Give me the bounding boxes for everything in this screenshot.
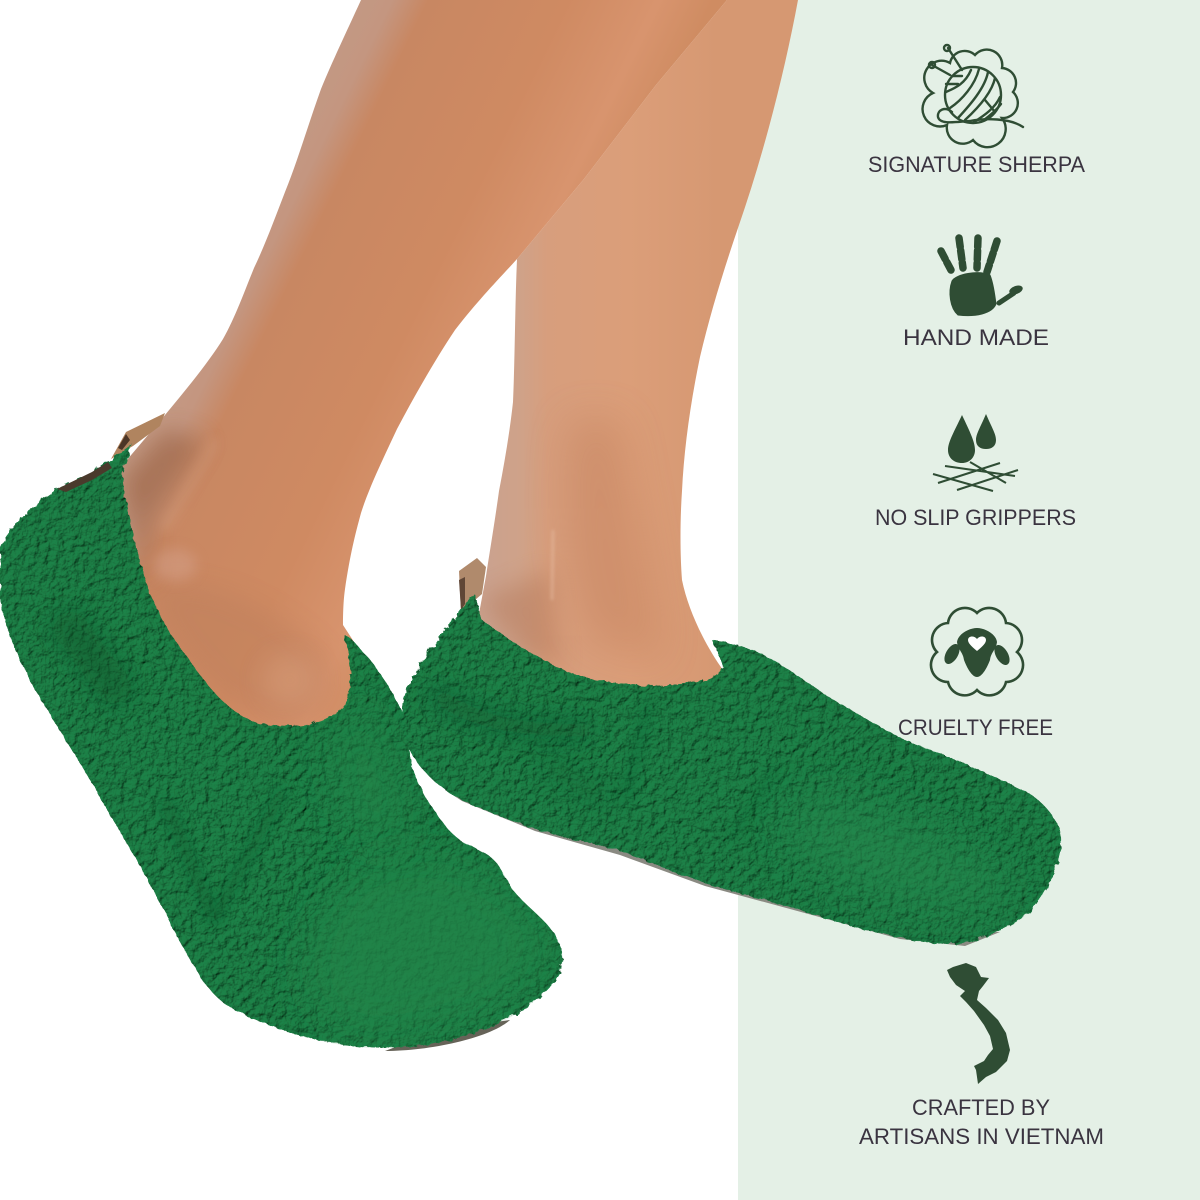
slipper: front foot: [0, 443, 563, 1048]
icon: map of Vietnam: [947, 963, 1010, 1084]
tag: front slipper: [111, 413, 165, 459]
label: artisans in vietnam: ARTISANS IN VIETNAM: [859, 1124, 1104, 1149]
sole: front slipper: [385, 1020, 510, 1051]
front leg: [110, 0, 727, 745]
label: signature sherpa: SIGNATURE SHERPA: [868, 152, 1085, 177]
sole: back slipper: [445, 790, 1000, 946]
label: cruelty free: CRUELTY FREE: [898, 715, 1053, 740]
label: no slip grippers: NO SLIP GRIPPERS: [875, 505, 1076, 530]
tag: dark label: [57, 462, 112, 492]
icon: hand print: [941, 238, 1024, 316]
icon: sheep in flower: [931, 608, 1023, 695]
slipper: back foot: [402, 593, 1061, 944]
label: crafted by: CRAFTED BY: [912, 1095, 1050, 1120]
back leg: [476, 0, 798, 705]
tag: back slipper: [459, 558, 486, 612]
label: hand made: HAND MADE: [903, 325, 1049, 350]
icon: drops and mesh: [933, 414, 1018, 491]
icon: yarn ball: [923, 45, 1023, 147]
panel: features: [738, 0, 1200, 1200]
